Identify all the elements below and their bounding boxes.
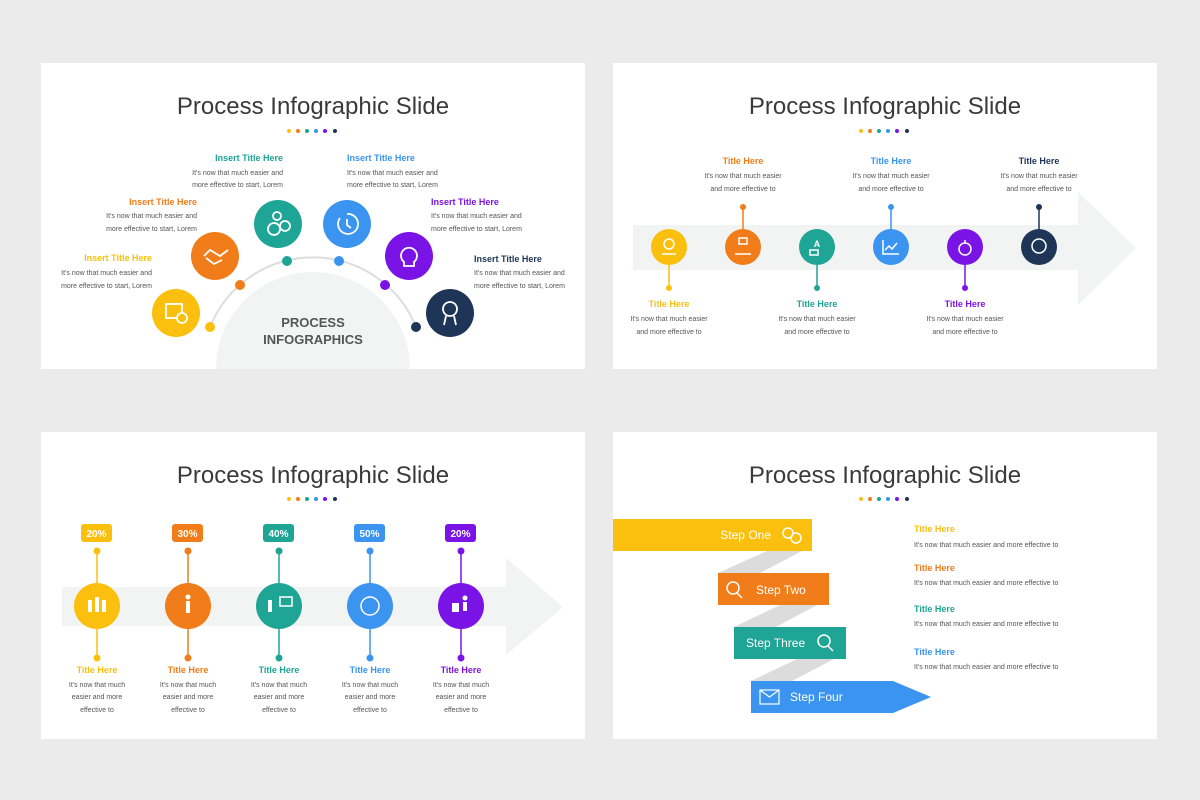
steps: easier and more xyxy=(254,694,304,701)
right texts: Title Here xyxy=(914,524,955,534)
steps: It's now that much xyxy=(160,682,216,689)
text blocks: more effective to start, Lorem xyxy=(106,226,197,233)
step one xyxy=(613,519,812,551)
panel: semicircle process: It's now that much easier and xyxy=(474,270,565,277)
panel: semicircle process xyxy=(41,63,585,369)
steps: Title Here xyxy=(259,665,299,675)
labels: and more effective to xyxy=(710,186,776,193)
steps: Title Here xyxy=(168,665,208,675)
steps: Title Here xyxy=(77,665,117,675)
steps: It's now that much xyxy=(433,682,489,689)
dots xyxy=(859,497,909,501)
steps: effective to xyxy=(80,707,114,714)
text blocks: It's now that much easier and xyxy=(192,170,283,177)
title: Process Infographic Slide xyxy=(749,462,1021,489)
labels: and more effective to xyxy=(1006,186,1072,193)
steps: Title Here xyxy=(441,665,481,675)
step three: Step Three xyxy=(746,636,805,650)
text blocks: Insert Title Here xyxy=(129,197,197,207)
center semicircle: INFOGRAPHICS xyxy=(263,332,363,347)
panel: semicircle process: more effective to start, Lorem xyxy=(431,226,522,233)
labels: and more effective to xyxy=(932,329,998,336)
dots xyxy=(287,497,337,501)
steps: 30% xyxy=(177,529,198,540)
labels: and more effective to xyxy=(858,186,924,193)
steps: easier and more xyxy=(345,694,395,701)
text blocks: more effective to start, Lorem xyxy=(192,182,283,189)
icon circles xyxy=(152,200,474,337)
panel: semicircle process: more effective to start, Lorem xyxy=(347,182,438,189)
arrow band xyxy=(633,192,1136,305)
steps: easier and more xyxy=(436,694,486,701)
labels xyxy=(630,156,1078,336)
icons xyxy=(88,594,468,615)
steps: It's now that much xyxy=(251,682,307,689)
arc xyxy=(210,257,416,327)
panel: semicircle process: Insert Title Here xyxy=(431,197,499,207)
steps: 20% xyxy=(86,529,107,540)
title: Process Infographic Slide xyxy=(177,462,449,489)
steps: easier and more xyxy=(72,694,122,701)
step two xyxy=(718,573,829,605)
steps: 50% xyxy=(359,529,380,540)
labels: Title Here xyxy=(945,299,985,309)
steps: 40% xyxy=(268,529,289,540)
panel: percentage timeline xyxy=(41,432,585,739)
steps: effective to xyxy=(444,707,478,714)
steps: It's now that much xyxy=(69,682,125,689)
steps: effective to xyxy=(262,707,296,714)
title: Process Infographic Slide xyxy=(177,93,449,120)
icon circles xyxy=(651,229,1057,265)
step four: Step Four xyxy=(790,690,843,704)
labels: It's now that much easier xyxy=(778,316,856,323)
steps: It's now that much xyxy=(342,682,398,689)
text blocks: Insert Title Here xyxy=(215,153,283,163)
text blocks: more effective to start, Lorem xyxy=(61,283,152,290)
steps: effective to xyxy=(353,707,387,714)
labels: It's now that much easier xyxy=(630,316,708,323)
step two: Step Two xyxy=(756,583,806,597)
right texts: It's now that much easier and more effective to xyxy=(914,580,1058,587)
labels: and more effective to xyxy=(636,329,702,336)
right texts: It's now that much easier and more effective to xyxy=(914,542,1058,549)
steps: effective to xyxy=(171,707,205,714)
step four xyxy=(751,681,931,713)
text blocks: It's now that much easier and xyxy=(106,213,197,220)
steps: Title Here xyxy=(350,665,390,675)
dots xyxy=(287,129,337,133)
text blocks xyxy=(61,153,283,290)
labels: Title Here xyxy=(649,299,689,309)
labels: It's now that much easier xyxy=(704,173,782,180)
text blocks: Insert Title Here xyxy=(84,253,152,263)
panel: semicircle process: Insert Title Here xyxy=(474,254,542,264)
step one: Step One xyxy=(720,528,771,542)
icon circles: A xyxy=(814,239,821,249)
panel: arrow timeline xyxy=(613,63,1157,369)
right texts: Title Here xyxy=(914,647,955,657)
steps xyxy=(69,524,489,714)
shadows xyxy=(718,551,834,681)
right texts: Title Here xyxy=(914,604,955,614)
center semicircle: PROCESS xyxy=(281,315,345,330)
labels: It's now that much easier xyxy=(926,316,1004,323)
arc dots xyxy=(205,256,421,332)
center semicircle xyxy=(216,272,410,369)
labels: Title Here xyxy=(723,156,763,166)
labels: It's now that much easier xyxy=(852,173,930,180)
steps: easier and more xyxy=(163,694,213,701)
text blocks: It's now that much easier and xyxy=(61,270,152,277)
labels: Title Here xyxy=(797,299,837,309)
labels: It's now that much easier xyxy=(1000,173,1078,180)
panel: steps xyxy=(613,432,1157,739)
steps: 20% xyxy=(450,529,471,540)
step three xyxy=(734,627,846,659)
right texts: It's now that much easier and more effective to xyxy=(914,621,1058,628)
panel: semicircle process: It's now that much easier and xyxy=(347,170,438,177)
right texts xyxy=(914,524,1058,671)
labels: Title Here xyxy=(1019,156,1059,166)
panel: semicircle process: more effective to start, Lorem xyxy=(474,283,565,290)
panel: semicircle process: It's now that much easier and xyxy=(431,213,522,220)
right texts: Title Here xyxy=(914,563,955,573)
dots xyxy=(859,129,909,133)
arrow band xyxy=(62,558,563,655)
labels: Title Here xyxy=(871,156,911,166)
labels: and more effective to xyxy=(784,329,850,336)
panel: semicircle process: Insert Title Here xyxy=(347,153,415,163)
right texts: It's now that much easier and more effective to xyxy=(914,664,1058,671)
title: Process Infographic Slide xyxy=(749,93,1021,120)
stems xyxy=(666,204,1042,291)
